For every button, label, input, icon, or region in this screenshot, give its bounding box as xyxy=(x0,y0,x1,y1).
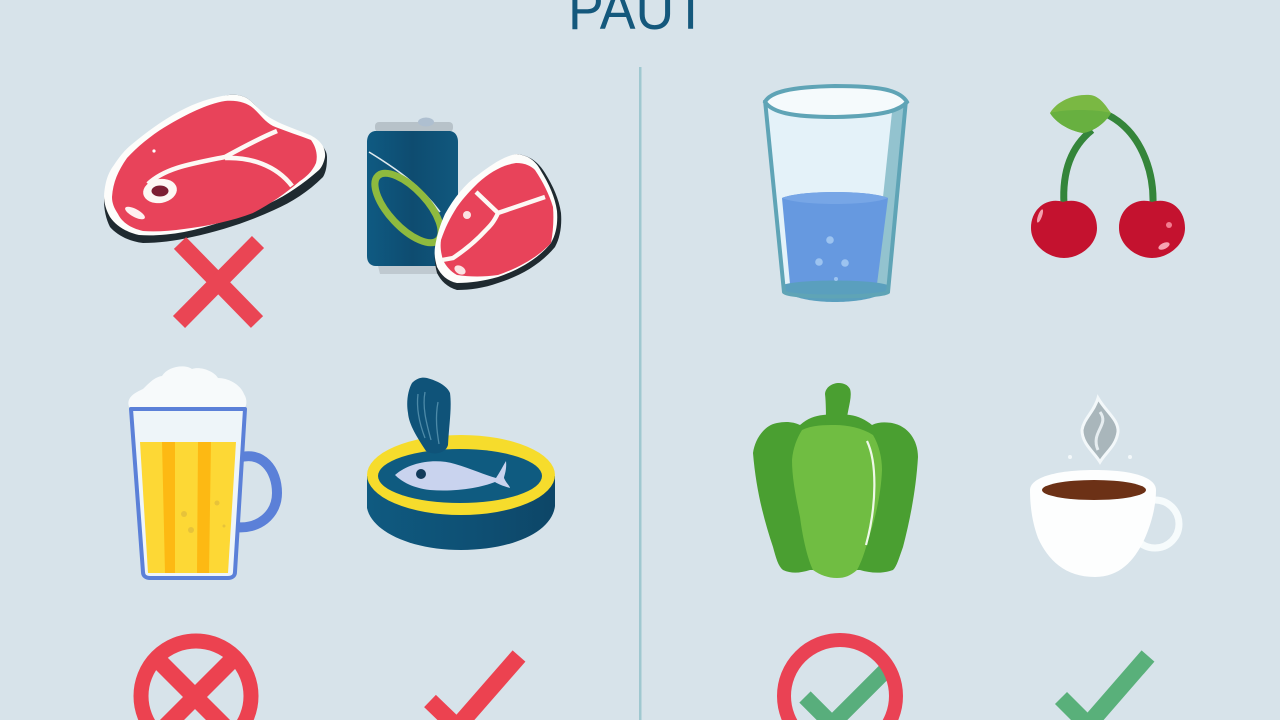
coffee xyxy=(1042,480,1146,500)
icon: sardine tin xyxy=(367,378,555,550)
beer xyxy=(140,442,236,573)
left cherry xyxy=(1031,201,1097,258)
tin body xyxy=(367,476,555,550)
steam xyxy=(1082,398,1118,462)
icon: coffee cup xyxy=(1030,398,1179,577)
icon: large steak xyxy=(104,95,327,243)
icon: beer mug xyxy=(128,366,277,578)
cup xyxy=(1030,470,1156,577)
icon: red check xyxy=(430,656,519,720)
stems xyxy=(1064,130,1092,204)
icon: red circled cross xyxy=(141,641,251,720)
center divider xyxy=(639,67,642,720)
leaf xyxy=(1050,95,1111,133)
icon: glass of water xyxy=(765,86,907,302)
tin inside xyxy=(378,449,542,503)
icon: cherries xyxy=(1031,95,1185,258)
yellow rim xyxy=(367,435,555,515)
icon: green check xyxy=(1061,656,1148,720)
lid xyxy=(407,378,451,453)
handle xyxy=(235,456,277,527)
icon: circled green check xyxy=(784,640,896,720)
icon: red cross under steak xyxy=(179,242,258,322)
fish xyxy=(395,461,510,491)
glass xyxy=(131,409,245,578)
icon: green bell pepper xyxy=(753,383,918,578)
right cherry xyxy=(1119,201,1185,258)
handle xyxy=(1131,500,1179,548)
icon: soda can xyxy=(364,118,458,274)
icon: small steak xyxy=(435,154,561,290)
foam xyxy=(128,366,246,407)
